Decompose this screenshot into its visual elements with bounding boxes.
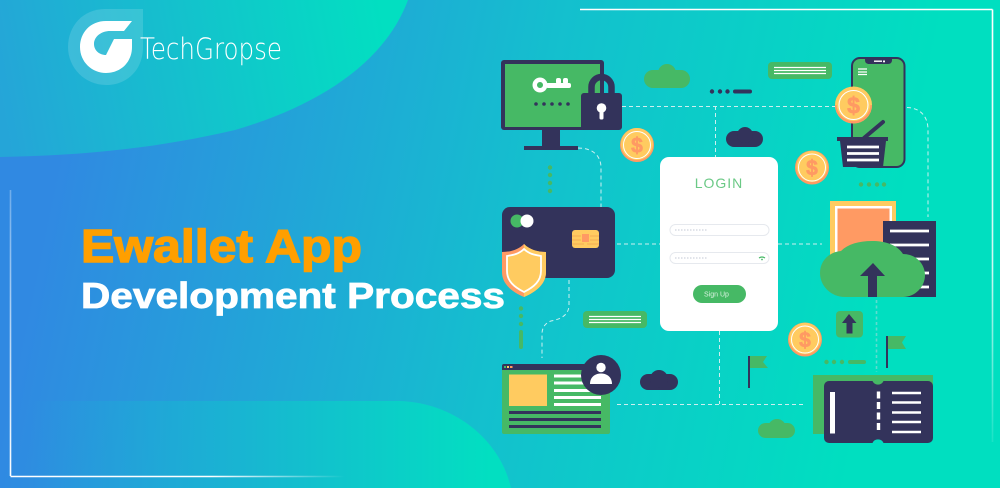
icon: browser profile (502, 355, 621, 434)
card chip (572, 230, 599, 248)
key (532, 78, 571, 93)
title (81, 220, 505, 316)
username field (670, 224, 769, 236)
top left curved panel (0, 0, 408, 157)
icon: phone with basket (837, 58, 904, 167)
icon: coin 3: $ (806, 157, 818, 180)
avatar (581, 355, 621, 395)
title line 1: Ewallet App (81, 220, 362, 272)
icon: coin 1 (620, 128, 654, 162)
icon: navy cloud top (726, 127, 763, 147)
icon: document with cloud upload (820, 201, 936, 297)
icon: flag right (886, 336, 906, 368)
icon: credit card with shield (502, 207, 615, 297)
basket (837, 122, 888, 167)
navy dots and dash (710, 89, 752, 94)
phone (852, 58, 904, 167)
icon: coin 1: $ (631, 134, 643, 158)
password dots (534, 102, 570, 106)
text document (883, 221, 936, 297)
upload arrow (860, 263, 885, 297)
upload cloud (820, 241, 925, 297)
bottom curved panel (0, 401, 511, 488)
icon: coin 4: $ (799, 329, 811, 352)
card (502, 207, 615, 278)
green chat bubble top (768, 62, 832, 79)
logo (68, 9, 282, 85)
login panel (660, 157, 778, 331)
icon: coin 3 (795, 150, 829, 184)
logo icon (68, 9, 143, 85)
shield (502, 244, 546, 297)
logo wordmark: TechGropse (140, 32, 282, 66)
icon: ticket (813, 375, 933, 443)
icon: coin 2 (835, 86, 872, 124)
icon: coin 4 (788, 322, 822, 356)
password field (670, 252, 769, 264)
login heading: LOGIN (695, 175, 743, 191)
green dots (859, 182, 886, 187)
icon: green cloud top (644, 64, 690, 88)
icon: green cloud bottom (758, 419, 795, 438)
green dots (548, 165, 552, 193)
icon: flag left (748, 356, 768, 388)
sign up button: Sign Up (704, 292, 729, 298)
card toggle (510, 214, 534, 228)
title line 2: Development Process (81, 275, 505, 316)
green dots and dash (824, 360, 866, 364)
green dots and dash left (519, 306, 523, 349)
browser window (502, 364, 610, 434)
sign up button (693, 285, 746, 303)
monitor (501, 60, 604, 150)
icon: small upload box (836, 311, 863, 338)
image card (830, 201, 896, 294)
icon: monitor with key and lock (501, 60, 622, 150)
padlock (581, 77, 622, 130)
green chat bubble middle (583, 311, 647, 328)
dashed connectors (542, 106, 928, 404)
icon: coin 2: $ (847, 92, 860, 118)
icon: navy cloud middle (640, 370, 678, 390)
